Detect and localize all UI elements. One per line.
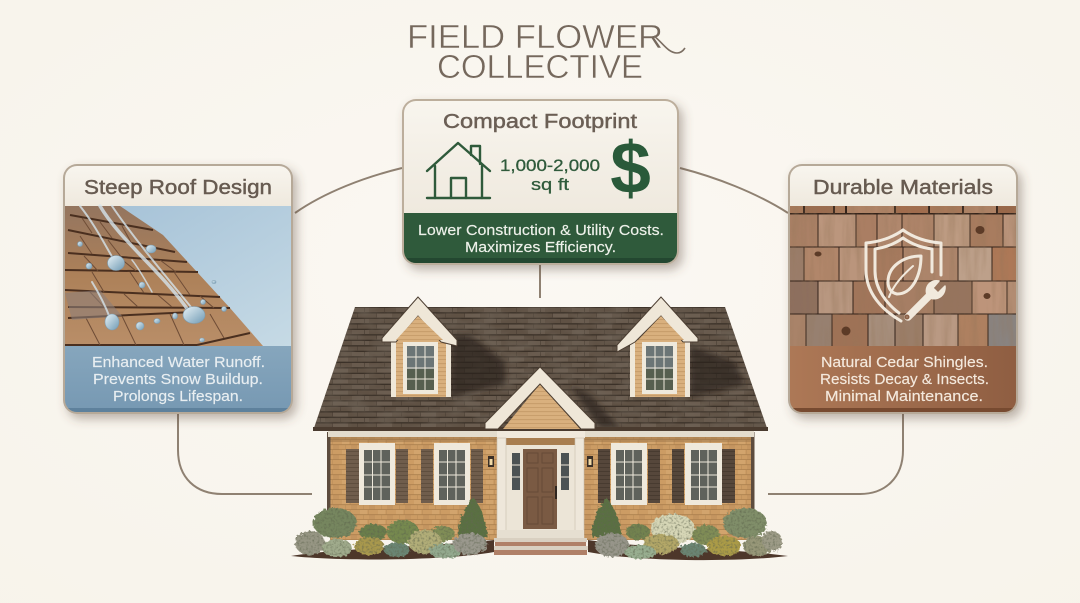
card caption text: Prolongs Lifespan.	[113, 389, 243, 405]
center gable	[485, 367, 595, 429]
panel: compact footprint	[402, 99, 679, 265]
caption band	[790, 346, 1016, 414]
card caption text	[418, 223, 664, 256]
front steps	[493, 530, 588, 555]
title: Field Flower Collective: FIELD FLOWER	[407, 18, 663, 55]
water drops	[78, 242, 226, 342]
card caption text: Prevents Snow Buildup.	[93, 372, 263, 388]
wood knots	[814, 226, 990, 336]
panel: steep roof design	[63, 164, 293, 414]
caption band	[404, 213, 677, 265]
mulch beds	[291, 540, 788, 560]
right dormer	[617, 297, 698, 397]
card heading: Steep Roof Design	[84, 177, 272, 199]
wood grain texture	[789, 206, 1017, 346]
house wall	[330, 436, 752, 540]
eave trim	[328, 431, 754, 437]
size label: sq ft	[531, 175, 569, 194]
card header background	[790, 166, 1016, 206]
right garden shrubs	[592, 497, 782, 559]
front door	[523, 449, 557, 529]
title: Field Flower Collective	[407, 18, 685, 85]
dormer and gable shadows	[450, 335, 745, 428]
icon: house outline	[427, 143, 490, 198]
card caption text	[92, 355, 265, 405]
illustration: water running down roof shingles	[65, 206, 291, 346]
card header background	[65, 166, 291, 206]
sidelights	[512, 453, 520, 490]
icon: dollar sign: $	[610, 128, 651, 209]
card header background	[404, 101, 677, 213]
windows and shutters	[346, 443, 735, 505]
size label: 1,000-2,000	[500, 156, 600, 175]
card caption text: Minimal Maintenance.	[825, 389, 983, 405]
panel: durable materials	[788, 164, 1018, 414]
wall lanterns	[488, 456, 494, 467]
porch	[488, 431, 593, 538]
card caption text	[820, 355, 989, 405]
illustration: cedar-shingled house	[291, 297, 788, 560]
water streams	[80, 206, 195, 318]
card heading: Compact Footprint	[443, 111, 638, 133]
caption band	[65, 346, 291, 414]
left dormer	[382, 297, 457, 397]
card caption text: Lower Construction & Utility Costs.	[418, 223, 664, 239]
card caption text: Resists Decay & Insects.	[820, 372, 989, 388]
card caption text: Natural Cedar Shingles.	[821, 355, 988, 371]
card caption text: Enhanced Water Runoff.	[92, 355, 265, 371]
card heading: Durable Materials	[813, 177, 993, 199]
icon: shield with leaf and wrench	[866, 230, 945, 321]
connector lines between cards and house	[178, 168, 903, 494]
main roof	[310, 305, 770, 431]
size label	[500, 156, 600, 194]
title: Field Flower Collective: COLLECTIVE	[437, 48, 643, 85]
card caption text: Maximizes Efficiency.	[465, 240, 616, 256]
left garden shrubs	[295, 497, 487, 558]
illustration: cedar shingles	[789, 206, 1018, 346]
